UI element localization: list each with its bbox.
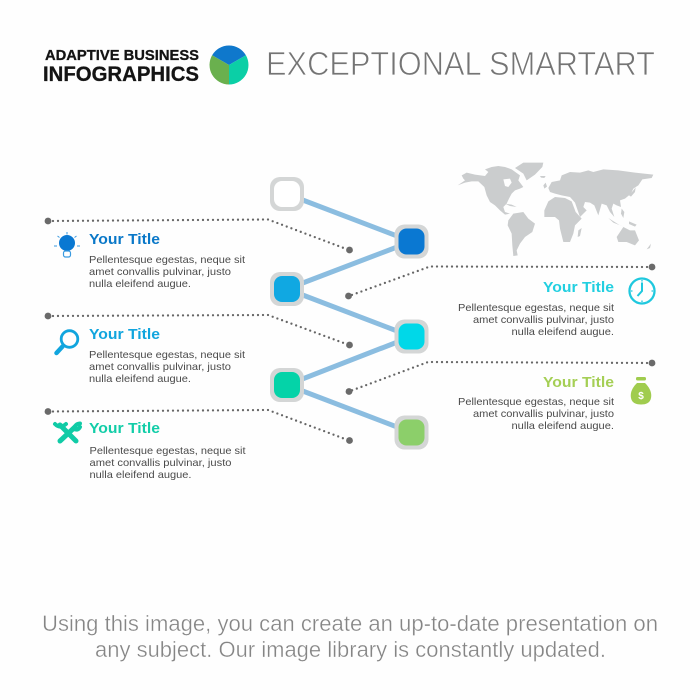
- text block: left 2: Pellentesque egestas, neque sit: [89, 349, 245, 361]
- text block: right 1: amet convallis pulvinar, justo: [473, 314, 614, 326]
- text block: right 1: nulla eleifend augue.: [512, 326, 614, 338]
- dotted leader right 2: [346, 360, 655, 395]
- text block: left 3: Your Title: [89, 420, 160, 437]
- text block: right 2: Pellentesque egestas, neque sit: [458, 396, 614, 408]
- icon: clock: [630, 278, 654, 304]
- text block: right 1: Your Title: [543, 279, 614, 296]
- node 1: [270, 177, 304, 211]
- dotted leader left 1: [45, 218, 353, 253]
- node 3: [270, 272, 304, 306]
- text block: left 3: nulla eleifend augue.: [90, 469, 192, 481]
- text block: right 1: Pellentesque egestas, neque sit: [458, 302, 614, 314]
- dotted leader right 1: [345, 264, 655, 299]
- icon: light bulb: [54, 232, 80, 257]
- text block: left 1: amet convallis pulvinar, justo: [89, 266, 231, 278]
- icon: logo pie: [210, 46, 248, 84]
- text block: left 1: nulla eleifend augue.: [89, 278, 191, 290]
- text block: right 2: Your Title: [543, 374, 614, 391]
- footer text: [42, 611, 658, 662]
- text block: right 2: nulla eleifend augue.: [512, 420, 614, 432]
- icon: magnifier: [56, 331, 78, 353]
- dotted leader left 2: [45, 313, 353, 348]
- icon: tools: [55, 424, 80, 441]
- text block: right 2: amet convallis pulvinar, justo: [473, 408, 614, 420]
- text block: left 2: nulla eleifend augue.: [89, 373, 191, 385]
- icon: money bag: [631, 377, 651, 404]
- brand logo text: INFOGRAPHICS: [43, 62, 199, 86]
- text block: left 1: [89, 231, 245, 290]
- text block: left 1: Your Title: [89, 231, 160, 248]
- text block: right 2: [458, 374, 614, 432]
- text block: left 3: [89, 420, 246, 481]
- text block: left 2: Your Title: [89, 326, 160, 343]
- icon: money bag: $: [638, 391, 644, 402]
- node 4: [394, 320, 428, 354]
- text block: left 2: [89, 326, 245, 385]
- title: EXCEPTIONAL SMARTART: [266, 45, 655, 82]
- connector lines: [287, 194, 412, 432]
- footer text: Using this image, you can create an up-to-date presentation on: [42, 611, 658, 636]
- world map: [458, 163, 653, 256]
- text block: left 3: amet convallis pulvinar, justo: [90, 457, 232, 469]
- text block: right 1: [458, 279, 614, 338]
- text block: left 2: amet convallis pulvinar, justo: [89, 361, 231, 373]
- text block: left 1: Pellentesque egestas, neque sit: [89, 254, 245, 266]
- node 6: [394, 416, 428, 450]
- text block: left 3: Pellentesque egestas, neque sit: [90, 445, 246, 457]
- node 5: [270, 368, 304, 402]
- node 2: [394, 224, 428, 258]
- footer text: any subject. Our image library is constantly updated.: [95, 637, 606, 662]
- brand logo text: ADAPTIVE BUSINESS: [45, 47, 199, 64]
- brand logo text: [43, 47, 199, 86]
- dotted leader left 3: [45, 408, 353, 444]
